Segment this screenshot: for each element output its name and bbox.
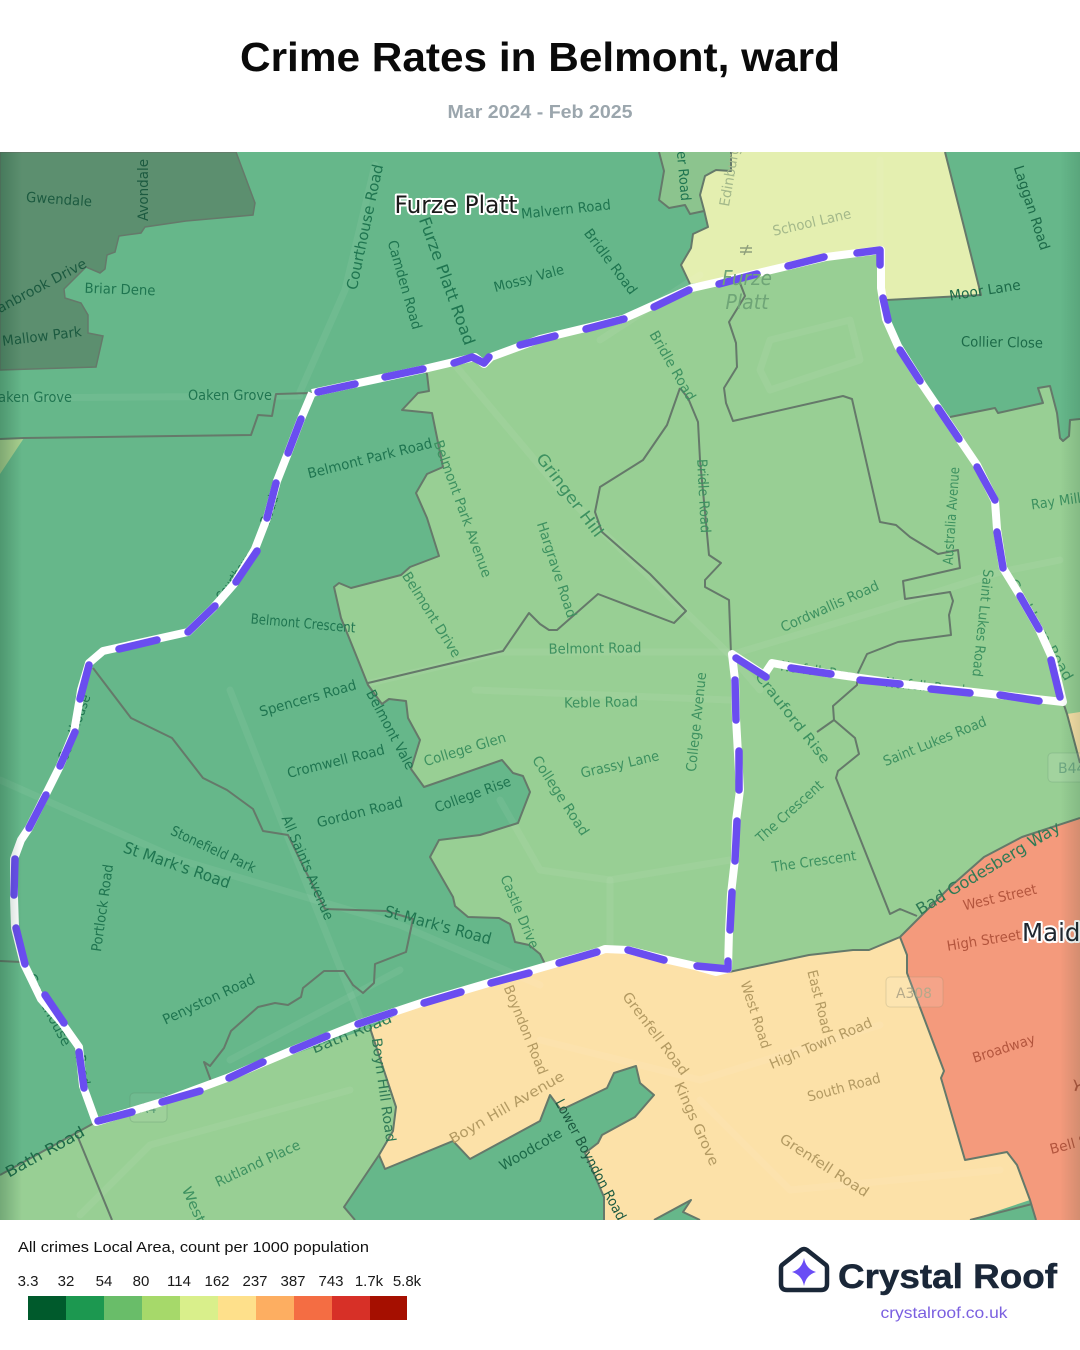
title: Crime Rates in Belmont, ward <box>240 34 840 80</box>
street labels on light green: Australia Avenue <box>941 467 963 565</box>
street labels on light green: Bad Godesberg Way <box>912 817 1064 919</box>
street labels on medium green: Collier Close <box>961 334 1043 352</box>
legend values <box>18 1273 422 1290</box>
street labels on medium green: Oaken Grove <box>188 388 272 404</box>
legend title: All crimes Local Area, count per 1000 population <box>18 1239 369 1256</box>
street labels on orange: High Town Road <box>767 1015 875 1073</box>
street labels on medium green: Lower Boyndon Road <box>551 1097 629 1223</box>
place label: Furze Platt station area <box>722 270 772 310</box>
map base: medium green areas <box>0 152 1080 1220</box>
street labels on medium green: Bridle Road <box>580 226 640 298</box>
street labels on light green: Norfolk Road <box>884 675 966 699</box>
street labels on medium green: Belmont Vale <box>362 687 418 773</box>
area: tan wedge on west edge <box>0 438 24 474</box>
street labels on light green: Grassy Lane <box>579 748 661 782</box>
street labels on red: Broadway <box>971 1031 1037 1067</box>
place label: Furze Platt station area: Furze <box>722 266 772 290</box>
street labels on light green: Castle Drive <box>496 873 542 951</box>
street labels on light green: College Road <box>528 753 592 839</box>
legend values: 237 <box>242 1273 268 1290</box>
legend values: 114 <box>167 1273 191 1290</box>
legend values: 743 <box>318 1273 344 1290</box>
street labels on light green: West <box>178 1184 208 1226</box>
legend colour scale <box>28 1296 407 1320</box>
street labels on yellow <box>719 152 851 236</box>
street labels on medium green: Belmont Park Road <box>306 436 434 482</box>
street labels on medium green: Gordon Road <box>315 795 405 831</box>
street labels on medium green: Penyston Road <box>160 972 258 1028</box>
area: orange sliver east edge <box>1068 712 1080 759</box>
street labels on orange: Boyndon Road <box>500 983 550 1077</box>
street labels on light green: Keble Road <box>564 694 638 712</box>
street labels on light green: Norfolk Road <box>779 659 861 685</box>
street labels on light green: Bridle Road <box>693 459 713 533</box>
street labels on orange: Grenfell Road <box>619 989 691 1079</box>
street labels on light green: Crauford Rise <box>751 669 833 767</box>
street labels on medium green: Camden Road <box>384 239 424 331</box>
street labels on medium green: Mossy Vale <box>492 262 566 296</box>
street labels on light green: Gringer Hill <box>532 449 608 541</box>
street labels on medium green: Belmont Crescent <box>250 611 356 637</box>
area: light green south-west <box>0 1028 396 1220</box>
place label: Furze Platt: Furze Platt <box>394 191 518 219</box>
street labels on light green: Rutland Place <box>213 1137 303 1191</box>
legend values: 1.7k <box>355 1273 384 1290</box>
street labels on light green: Cookham Road <box>1004 576 1076 684</box>
street labels on medium green: Road <box>72 1054 92 1086</box>
street labels on medium green: Laggan Road <box>1010 164 1052 252</box>
street labels on medium green: Courthouse <box>22 971 74 1049</box>
place label: Furze Platt station area: Platt <box>726 290 770 314</box>
logo icon: house with star <box>781 1249 827 1290</box>
street labels on medium green: Malvern Road <box>520 197 612 223</box>
street labels on medium green: Bath Road <box>2 1123 88 1181</box>
map edge shading <box>0 152 1080 1220</box>
street labels on medium green: St Mark's Road <box>121 838 233 892</box>
street labels on light green: Bath Road <box>310 1011 394 1057</box>
logo wordmark: Crystal Roof <box>838 1258 1058 1296</box>
street labels on orange: Kings Grove <box>670 1080 722 1168</box>
street labels on orange: Grenfell Road <box>776 1131 872 1201</box>
street labels on orange: West Road <box>737 979 773 1051</box>
street labels on medium green: Cromwell Road <box>286 742 386 782</box>
street labels on medium green: Courthouse Road <box>343 163 387 291</box>
street labels on medium green: Moor Lane <box>948 277 1022 305</box>
street labels on light green: Hargrave Road <box>533 520 579 620</box>
street labels on orange <box>447 969 882 1201</box>
area: pale yellow School Lane <box>681 152 981 300</box>
legend values: 80 <box>133 1273 149 1290</box>
street labels on light green: Boyn Hill Road <box>368 1037 398 1143</box>
street labels on orange: Boyn Hill Avenue <box>447 1069 567 1147</box>
street labels on light green: College Glen <box>422 730 508 770</box>
street labels on medium green: Woodcote <box>497 1126 565 1174</box>
street labels on medium green: Courthouse <box>213 546 261 604</box>
street labels on medium green: Courthouse <box>56 692 94 764</box>
area: red town centre <box>900 818 1080 1220</box>
street labels on red: High Street <box>946 927 1023 955</box>
street labels on light green: Belmont Drive <box>398 569 464 661</box>
road shield: B4447 <box>1048 753 1080 782</box>
street labels on light green: Saint Lukes Road <box>968 568 996 678</box>
street labels on light green: The Crescent <box>752 777 827 847</box>
street labels on medium green: All Saints Avenue <box>278 813 336 923</box>
minor roads <box>14 162 730 1064</box>
street labels on medium green: St Mark's Road <box>382 902 494 948</box>
street labels on light green: Saint Lukes Road <box>881 714 989 770</box>
street labels on light green: Cordwallis Road <box>778 578 882 636</box>
website link: crystalroof.co.uk <box>880 1305 1009 1322</box>
road shield: A4 <box>130 1093 167 1122</box>
street labels on orange: East Road <box>803 969 835 1035</box>
legend values: 162 <box>204 1273 230 1290</box>
area: dark green Gwendale <box>0 152 255 370</box>
street labels on light green: Bridle Road <box>646 328 698 404</box>
street labels on light green: Belmont Road <box>548 640 642 658</box>
street labels on light green: The Crescent <box>770 848 858 876</box>
street labels on yellow: School Lane <box>771 206 853 240</box>
road shield: A308 <box>886 977 943 1007</box>
street labels on red: West Street <box>962 882 1039 914</box>
area boundaries <box>0 152 1080 1220</box>
street labels on light green: Belmont Park Avenue <box>430 438 494 580</box>
street labels on medium green: College Rise <box>433 774 513 816</box>
street labels on medium green: Spencers Road <box>258 678 358 720</box>
street labels on medium green: Gwendale <box>26 190 92 210</box>
subtitle: date range: Mar 2024 - Feb 2025 <box>448 102 632 122</box>
street labels on yellow: Edinburgh <box>717 136 745 208</box>
street labels on medium green: Portlock Road <box>89 863 117 953</box>
street labels on medium green: Furze Platt Road <box>415 214 479 348</box>
area: small green north pocket <box>659 152 731 214</box>
ward boundary: purple dashes <box>14 250 1060 1121</box>
street labels on medium green: er Road <box>673 150 693 202</box>
street labels on medium green: Road <box>258 493 282 527</box>
area: light green Belmont east and centre <box>334 250 1080 972</box>
legend values: 3.3 <box>18 1273 38 1290</box>
street labels on orange: South Road <box>806 1071 882 1105</box>
area: orange south Boyn Hill <box>370 937 1030 1220</box>
ward boundary: white casing <box>14 250 1063 1122</box>
street labels on medium green: Stonefield Park <box>168 823 259 877</box>
street labels on red <box>946 882 1080 1158</box>
legend values: 5.8k <box>393 1273 422 1290</box>
legend values: 387 <box>280 1273 306 1290</box>
legend values: 54 <box>96 1273 112 1290</box>
road shield: A308: A308 <box>896 986 932 1002</box>
street labels on medium green: Briar Dene <box>84 281 156 299</box>
road shield: A4: A4 <box>139 1102 157 1117</box>
street labels on medium green: Avondale <box>136 159 152 221</box>
street labels on light green <box>178 328 1080 1226</box>
street labels on light green: College Avenue <box>684 671 710 773</box>
legend values: 32 <box>58 1273 74 1290</box>
icon: railway station <box>740 245 752 255</box>
street labels on medium green: Mallow Park <box>1 324 84 350</box>
street labels on medium green <box>0 150 1052 1223</box>
